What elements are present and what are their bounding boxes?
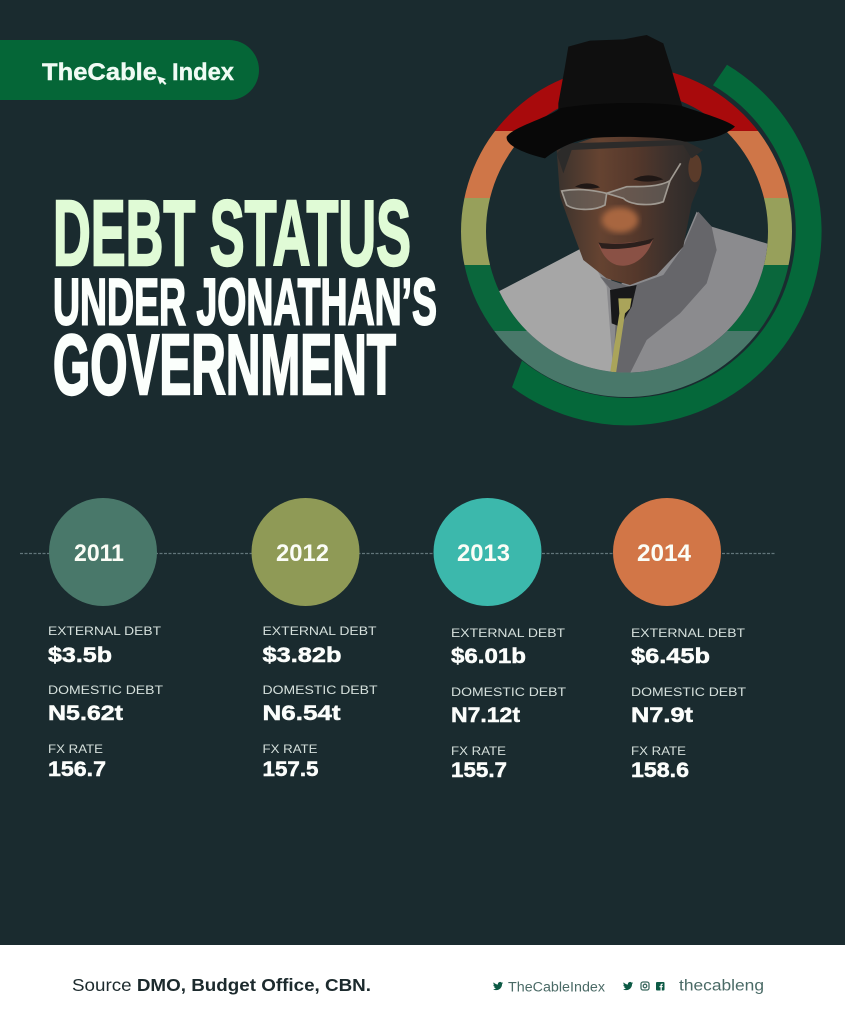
fx rate 2014 [631,746,689,782]
column: 2011 [48,498,163,781]
portrait of Goodluck Jonathan [498,35,772,373]
hat brim [507,103,735,158]
domestic debt 2011: DOMESTIC DEBT [48,685,163,697]
domestic debt 2012: DOMESTIC DEBT [262,685,378,697]
icon: facebook [656,982,664,990]
fx rate 2014: FX RATE [631,746,686,758]
logo badge [0,40,259,100]
year marker 2013 [434,498,542,606]
fx rate 2013: 155.7 [451,759,507,782]
icon: twitter second [623,982,633,990]
external debt 2013 [451,628,565,668]
year marker 2012: 2012 [276,540,329,567]
external debt 2012: $3.82b [262,644,342,667]
domestic debt 2013 [451,687,566,727]
fx rate 2013: FX RATE [451,746,506,758]
year marker 2011 [49,498,157,606]
nose [602,207,638,233]
external debt 2012: EXTERNAL DEBT [262,626,376,638]
robe collar [600,212,717,373]
fx rate 2014: 158.6 [631,759,689,782]
fx rate 2011: 156.7 [48,758,106,781]
external debt 2011: $3.5b [48,644,112,667]
timeline dashed line [20,552,775,554]
logo badge: TheCable [42,59,157,86]
fx rate 2011: FX RATE [48,744,103,756]
robe left shoulder [498,247,613,373]
mouth [598,238,653,266]
social handles [493,978,764,994]
title [53,181,437,413]
external debt 2011: EXTERNAL DEBT [48,626,161,638]
year marker 2013: 2013 [457,540,510,567]
domestic debt 2014: N7.9t [631,704,693,727]
handle: thecableng: thecableng [679,978,764,994]
source line: Source DMO, Budget Office, CBN. [72,975,371,995]
eyes [575,183,600,189]
external debt 2014 [631,628,745,668]
column: 2013 [434,498,566,782]
title line: debt status: DEBT STATUS [53,181,411,285]
domestic debt 2012: N6.54t [262,702,341,725]
glasses [562,163,681,209]
fx rate 2012: 157.5 [262,758,319,781]
domestic debt 2014: DOMESTIC DEBT [631,687,746,699]
neck and face [557,133,700,285]
year marker 2012 [252,498,360,606]
ear [688,154,702,182]
icon: instagram [641,982,649,990]
logo badge: Index [172,59,235,86]
domestic debt 2011: N5.62t [48,702,123,725]
footer band [0,945,845,1024]
fx rate 2013 [451,746,507,782]
gold zip [610,298,632,373]
fx rate 2011 [48,744,106,781]
striped ring [461,72,792,397]
external debt 2014: $6.45b [631,645,710,668]
domestic debt 2012 [262,685,378,725]
hair [557,140,703,173]
collar opening [610,285,637,327]
external debt 2013: EXTERNAL DEBT [451,628,565,640]
column: 2012 [252,498,378,781]
domestic debt 2011 [48,685,163,725]
title line: government: GOVERNMENT [53,318,396,413]
outer green arc [512,65,822,425]
fx rate 2012: FX RATE [262,744,318,756]
domestic debt 2014 [631,687,746,727]
icon: twitter [493,982,503,990]
external debt 2011 [48,626,161,667]
external debt 2014: EXTERNAL DEBT [631,628,745,640]
year marker 2014 [613,498,721,606]
external debt 2012 [262,626,376,667]
column: 2014 [613,498,746,782]
handle: TheCableIndex: TheCableIndex [508,980,605,994]
domestic debt 2013: DOMESTIC DEBT [451,687,566,699]
robe [498,212,772,373]
external debt 2013: $6.01b [451,645,526,668]
year marker 2011: 2011 [74,540,124,567]
fx rate 2012 [262,744,319,781]
domestic debt 2013: N7.12t [451,704,520,727]
title line: under jonathan's: UNDER JONATHAN’S [53,264,437,338]
year marker 2014: 2014 [637,540,692,567]
hat crown [558,35,683,117]
